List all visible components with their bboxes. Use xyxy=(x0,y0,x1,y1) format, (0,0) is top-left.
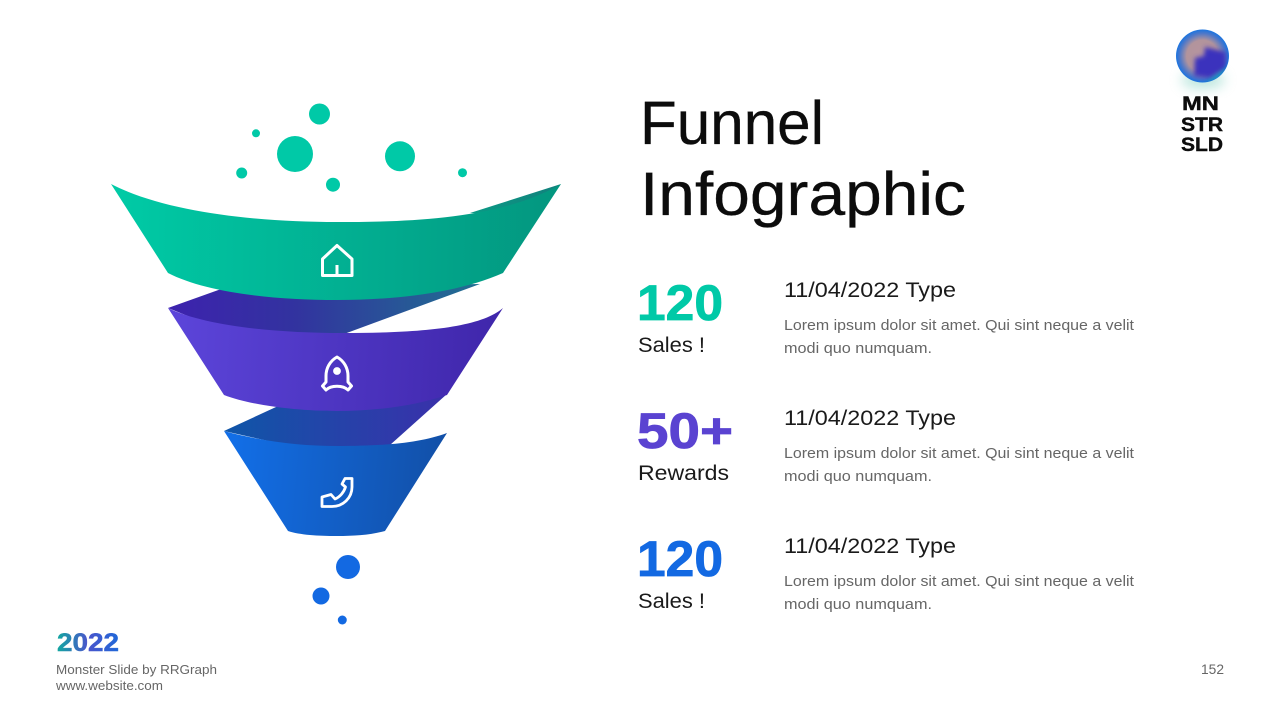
title: Infographic xyxy=(640,160,966,228)
icon: rocket xyxy=(322,357,352,390)
credits: www.website.com xyxy=(55,678,163,693)
stat row 3 xyxy=(637,531,1135,613)
icon: phone xyxy=(322,478,352,506)
funnel infographic xyxy=(111,104,561,624)
funnel tier 3: blue xyxy=(224,394,447,536)
funnel tier 1: green xyxy=(111,184,561,300)
description 3: Lorem ipsum dolor sit amet. Qui sint neque a velit xyxy=(784,573,1135,590)
credits: Monster Slide by RRGraph xyxy=(56,662,217,677)
icon: sphere xyxy=(1176,30,1232,89)
stat: 120 sales blue xyxy=(637,531,723,613)
description 3: 11/04/2022 Type xyxy=(784,535,956,558)
description 2: modi quo numquam. xyxy=(784,468,932,485)
stat: 120 sales blue: 120 xyxy=(637,531,723,587)
stat: 50+ rewards: 50+ xyxy=(637,403,733,459)
stat: 120 sales xyxy=(637,275,723,357)
description 1: 11/04/2022 Type xyxy=(784,279,956,302)
stat: 120 sales blue: Sales ! xyxy=(638,590,705,613)
description 2: Lorem ipsum dolor sit amet. Qui sint neque a velit xyxy=(784,445,1135,462)
logo text: SLD xyxy=(1181,135,1223,156)
stat row 1 xyxy=(637,275,1135,357)
stat: 50+ rewards: Rewards xyxy=(638,462,729,485)
title: Funnel xyxy=(640,89,824,157)
stat: 50+ rewards xyxy=(637,403,733,485)
logo text: MN xyxy=(1182,94,1219,115)
top particles xyxy=(236,104,467,192)
description 1: Lorem ipsum dolor sit amet. Qui sint neque a velit xyxy=(784,317,1135,334)
bottom particles xyxy=(312,555,360,624)
logo text xyxy=(1181,94,1223,156)
title xyxy=(640,89,966,228)
description 1: modi quo numquam. xyxy=(784,340,932,357)
description 1 xyxy=(784,279,1135,357)
credits xyxy=(55,662,217,693)
footer xyxy=(55,629,1224,693)
icon: house xyxy=(322,246,352,276)
year: 2022 xyxy=(57,629,119,657)
funnel tier 2: purple xyxy=(168,284,503,411)
description 3: modi quo numquam. xyxy=(784,596,932,613)
stat: 120 sales: Sales ! xyxy=(638,334,705,357)
logo xyxy=(1176,30,1232,156)
stat: 120 sales: 120 xyxy=(637,275,723,331)
logo text: STR xyxy=(1181,115,1223,136)
description 3 xyxy=(784,535,1135,613)
page number: 152 xyxy=(1201,661,1224,677)
description 2: 11/04/2022 Type xyxy=(784,407,956,430)
description 2 xyxy=(784,407,1135,485)
stat row 2 xyxy=(637,403,1135,485)
